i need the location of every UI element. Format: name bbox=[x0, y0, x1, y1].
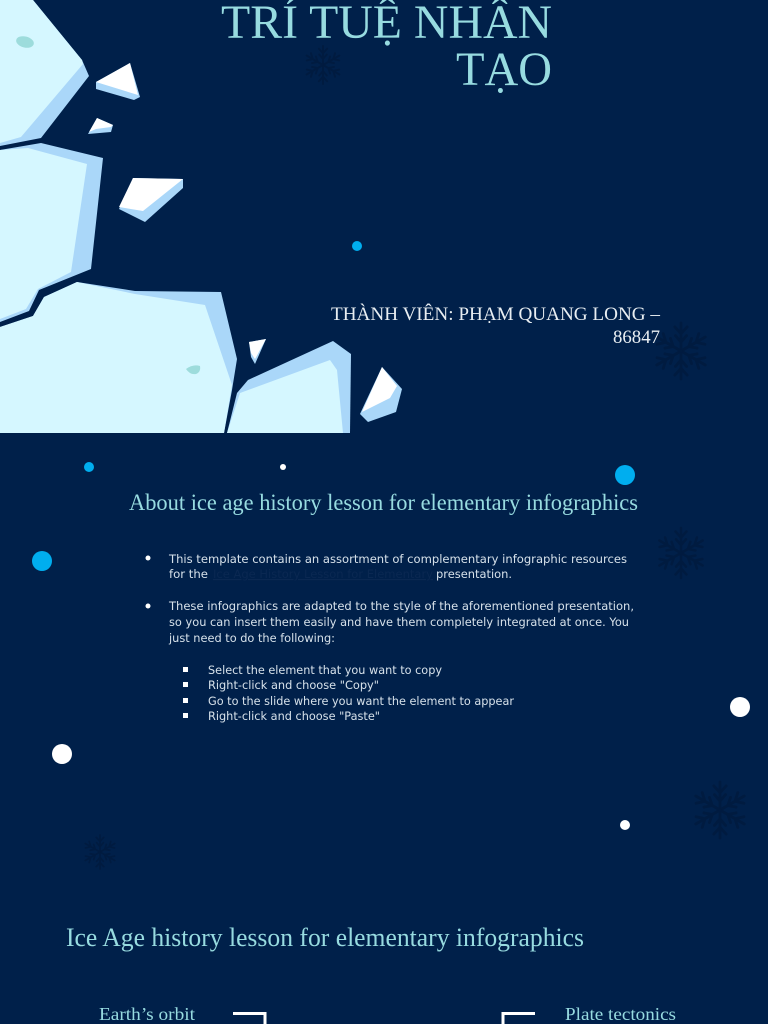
bracket: right bbox=[503, 1014, 535, 1024]
ice block: top bbox=[0, 0, 89, 146]
snowflakes bbox=[83, 46, 747, 869]
ice block: bottom large bbox=[0, 282, 237, 433]
sub list: Go to the slide where you want the element to appear bbox=[208, 694, 514, 708]
label: Earth's orbit: Earth’s orbit bbox=[99, 1004, 195, 1024]
member credit: 86847 bbox=[613, 327, 660, 348]
bullet paragraph 2: just need to do the following: bbox=[168, 631, 335, 645]
title: TẠO bbox=[456, 43, 552, 96]
ice block: bottom right bbox=[227, 341, 351, 433]
sub list bbox=[183, 663, 514, 723]
ice shard 5 bbox=[360, 367, 402, 422]
heading: ice age: Ice Age history lesson for elementary infographics bbox=[66, 923, 584, 952]
bullet paragraph 1: for the bbox=[169, 567, 208, 581]
ice block: middle bbox=[0, 143, 103, 322]
ice shard 3 bbox=[119, 178, 183, 222]
bullet paragraph 2: so you can insert them easily and have them completely integrated at once. You bbox=[169, 615, 629, 629]
bullet paragraph 1 bbox=[146, 552, 627, 581]
sub list: Right-click and choose "Paste" bbox=[208, 709, 380, 723]
bracket: left bbox=[233, 1014, 265, 1024]
sub list: Right-click and choose "Copy" bbox=[208, 678, 379, 692]
title bbox=[221, 0, 552, 96]
ice shard 1 bbox=[96, 63, 140, 100]
ice shard 4 bbox=[249, 339, 266, 364]
bullet paragraph 1: Ice Age History Lesson for Elementary bbox=[213, 567, 433, 581]
member credit: THÀNH VIÊN: PHẠM QUANG LONG – bbox=[331, 303, 660, 325]
ice shard 2 bbox=[88, 118, 113, 134]
bullet paragraph 2: These infographics are adapted to the style of the aforementioned presentation, bbox=[168, 599, 634, 613]
bullet paragraph 1: presentation. bbox=[436, 567, 512, 581]
bullet paragraph 2 bbox=[146, 599, 634, 645]
label: Plate tectonics: Plate tectonics bbox=[565, 1004, 676, 1024]
heading: about: About ice age history lesson for elementary infographics bbox=[129, 490, 638, 515]
sub list: Select the element that you want to copy bbox=[208, 663, 442, 677]
ice blocks illustration bbox=[0, 0, 402, 433]
bullet paragraph 1: This template contains an assortment of complementary infographic resources bbox=[168, 552, 627, 566]
member credit bbox=[331, 303, 660, 348]
decorative dots bbox=[32, 241, 750, 830]
body text: instructions bbox=[146, 552, 634, 723]
